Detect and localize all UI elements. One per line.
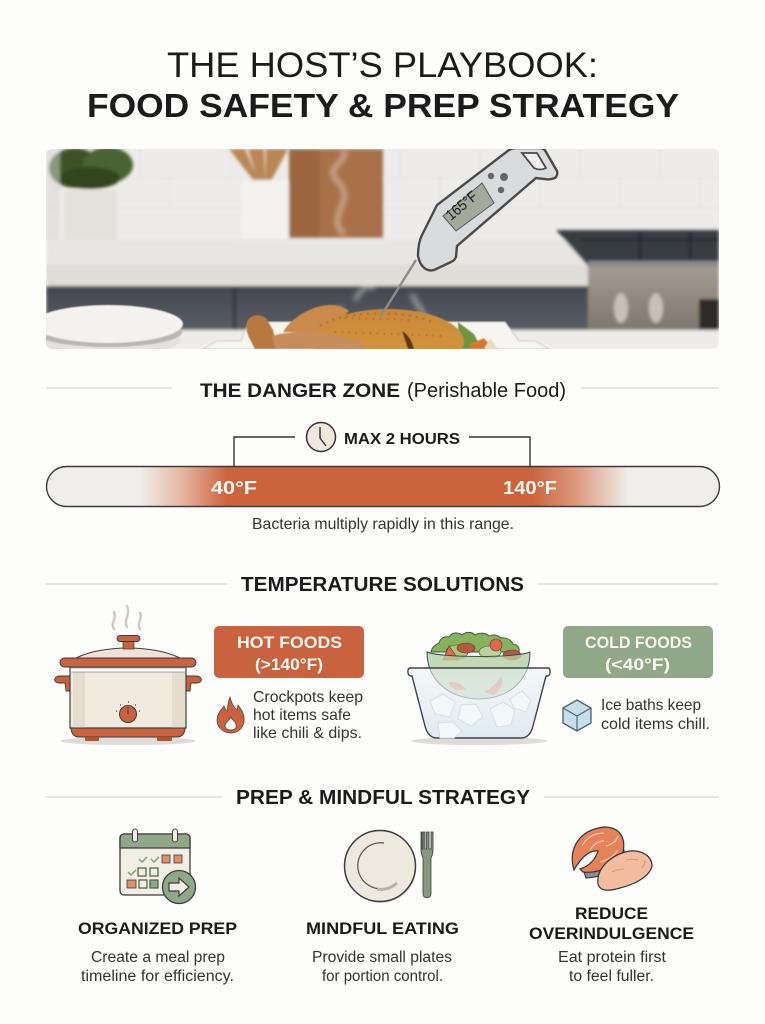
text: cold foods note: cold items chill. [601,716,710,733]
column: reduce overindulgence [529,904,694,985]
icon: crockpot [55,606,201,745]
column: reduce overindulgence: REDUCE [575,904,648,923]
title: FOOD SAFETY & PREP STRATEGY [87,87,679,124]
text: hot foods note [253,689,363,742]
column: reduce overindulgence: OVERINDULGENCE [529,924,694,943]
icon: ice cube [563,700,591,731]
text: hot foods note: hot items safe [253,707,351,724]
bracket: max 2 hours [234,422,530,466]
label: hot foods [214,626,364,678]
label: cold foods: COLD FOODS [585,633,692,652]
prep and mindful strategy heading: PREP & MINDFUL STRATEGY [236,786,530,809]
roast chicken [246,304,464,349]
column: mindful eating: MINDFUL EATING [306,919,459,938]
column: mindful eating: for portion control. [322,968,443,985]
photo: thermometer in roast chicken in kitchen [46,149,719,349]
ice cubes [430,691,531,738]
column: organized prep: ORGANIZED PREP [78,919,237,938]
text: cold foods note [601,697,710,733]
icon: salmon and chicken breast [572,827,652,890]
temperature bar [46,466,720,506]
danger zone heading: THE DANGER ZONE [200,380,400,402]
icon: salad in ice bath [408,632,550,745]
icon: flame [217,697,244,733]
column: reduce overindulgence: to feel fuller. [569,968,654,985]
potted plant [46,147,133,243]
label: cold foods: (<40°F) [605,655,670,674]
icon: calendar [120,829,196,904]
column: mindful eating [306,919,459,985]
temperature bar: 140°F [503,477,557,498]
danger zone caption: Bacteria multiply rapidly in this range. [252,516,514,533]
cabinets [46,286,588,332]
text: hot foods note: like chili & dips. [253,725,362,742]
text: cold foods note: Ice baths keep [601,697,701,714]
outer glass bowl [408,668,550,738]
inner bowl [427,652,530,699]
label: hot foods: HOT FOODS [237,633,342,652]
steam [328,149,430,314]
column: organized prep [78,919,237,985]
label: hot foods: (>140°F) [255,655,323,674]
column: reduce overindulgence: Eat protein first [558,949,667,966]
column: mindful eating: Provide small plates [312,949,452,966]
column: organized prep: timeline for efficiency. [81,968,234,985]
thermometer [381,148,557,316]
title: THE HOST’S PLAYBOOK: [167,46,598,85]
stacked plates [46,304,184,349]
label: cold foods [563,626,713,678]
icon: clock [306,422,336,452]
baking dish [203,322,549,349]
column: organized prep: Create a meal prep [91,949,225,966]
icon: plate and fork [344,830,433,903]
danger zone heading [46,380,719,402]
temperature bar: 40°F [211,477,257,498]
wooden utensils and board [229,149,383,243]
salad leaves [431,632,521,660]
title [87,46,679,124]
text: hot foods note: Crockpots keep [253,689,363,706]
stove [556,230,719,332]
lower counter [46,330,719,350]
temperature solutions heading: TEMPERATURE SOLUTIONS [241,573,524,596]
bracket: max 2 hours: MAX 2 HOURS [344,431,460,448]
danger zone heading: (Perishable Food) [407,380,566,402]
counter [46,239,588,269]
thermometer: 165°F [443,188,481,224]
